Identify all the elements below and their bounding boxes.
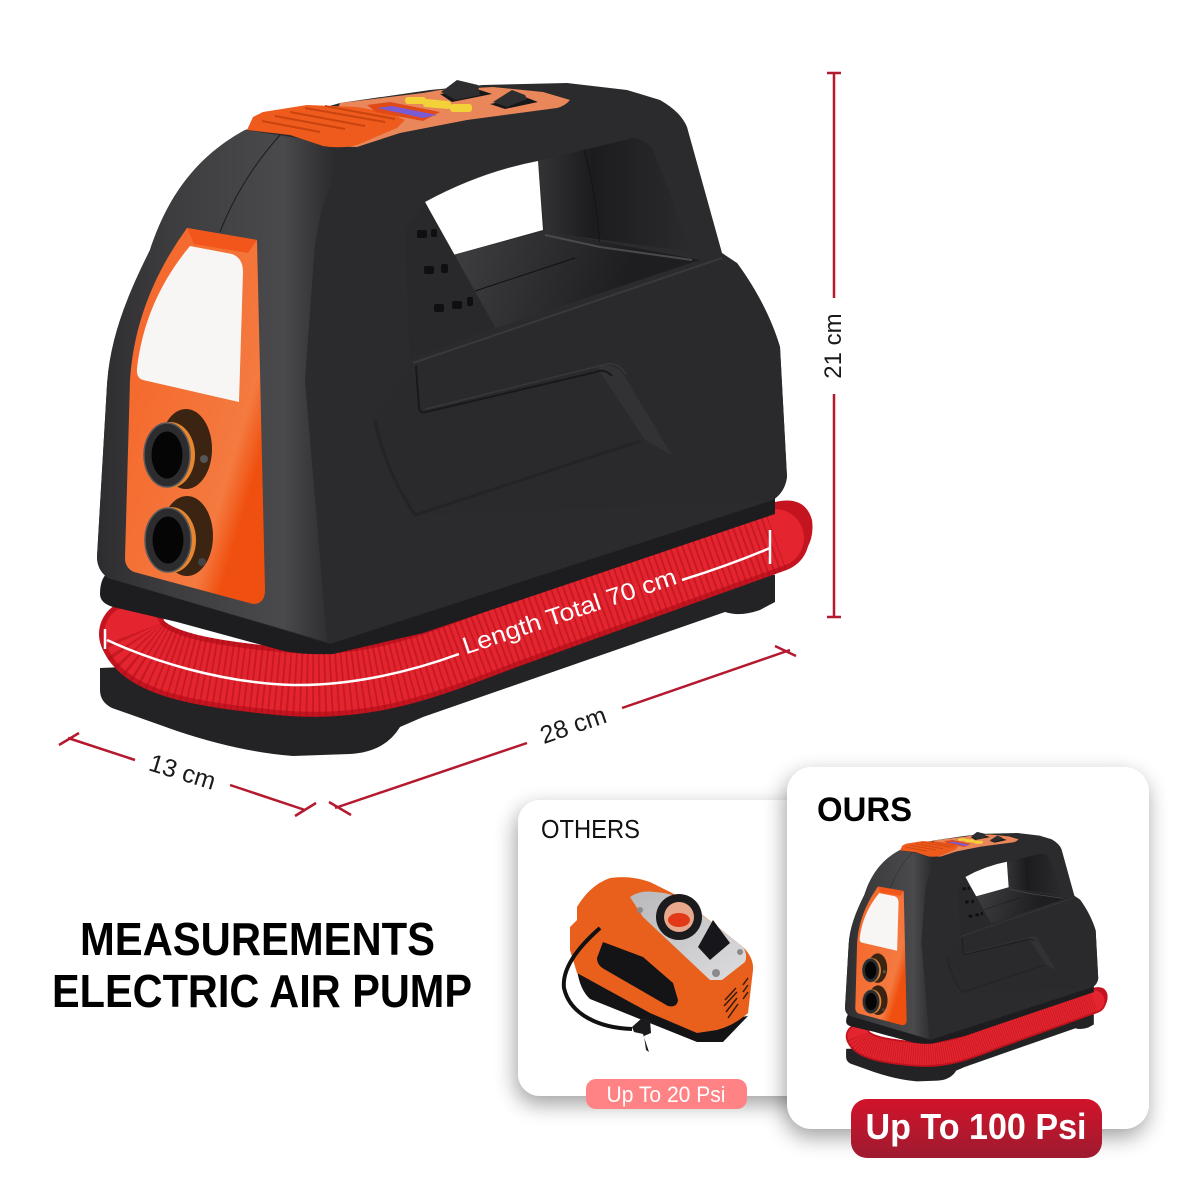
our pump image [845,832,1108,1081]
ours card [787,767,1149,1129]
upper air port [144,409,212,489]
competitor pump image [564,877,753,1052]
panel: others [518,800,818,1109]
body base ledge [100,490,775,654]
ours pressure pill [851,1099,1102,1158]
handle shelf [453,231,700,328]
others card [518,800,818,1096]
front face shading [97,130,357,642]
lcd screen [367,102,440,121]
orange front panel [125,228,265,604]
others pressure pill [586,1079,747,1109]
white lamp [137,246,243,402]
panel: ours [787,767,1149,1158]
dimension: depth 13 cm [59,733,316,816]
others pressure pill: Up To 20 Psi [606,1082,726,1107]
dimension: width 28 cm [329,646,796,815]
vent wedge with holes [405,202,495,360]
title: MEASUREMENTS [80,913,435,965]
top seam [220,135,280,232]
raised side panel [372,258,787,515]
title: ELECTRIC AIR PUMP [52,965,472,1017]
others label: OTHERS [541,814,640,844]
top control panel [323,87,570,147]
hose tip and coiled red hose [133,500,813,683]
dimension: height 21 cm [820,72,847,617]
black pump body [97,83,787,644]
dimension: depth 13 cm: 13 cm [146,749,219,796]
length line: hose total 70 cm: Length Total 70 cm [459,564,680,660]
orange grip pad [247,105,405,147]
length line: hose total 70 cm [105,530,770,685]
dimension: height 21 cm: 21 cm [820,313,847,379]
handle inner wall [538,138,692,252]
recessed grip [375,364,672,515]
main product: electric air pump [97,80,813,756]
title [52,913,472,1017]
dimension: width 28 cm: 28 cm [537,701,610,750]
ours pressure pill: Up To 100 Psi [866,1106,1086,1147]
yellow buttons [405,97,472,112]
handle opening [425,161,543,255]
lower air port [145,496,213,576]
bottom base plate [100,560,775,756]
ours label: OURS [817,791,912,829]
rocker switches [440,80,538,109]
